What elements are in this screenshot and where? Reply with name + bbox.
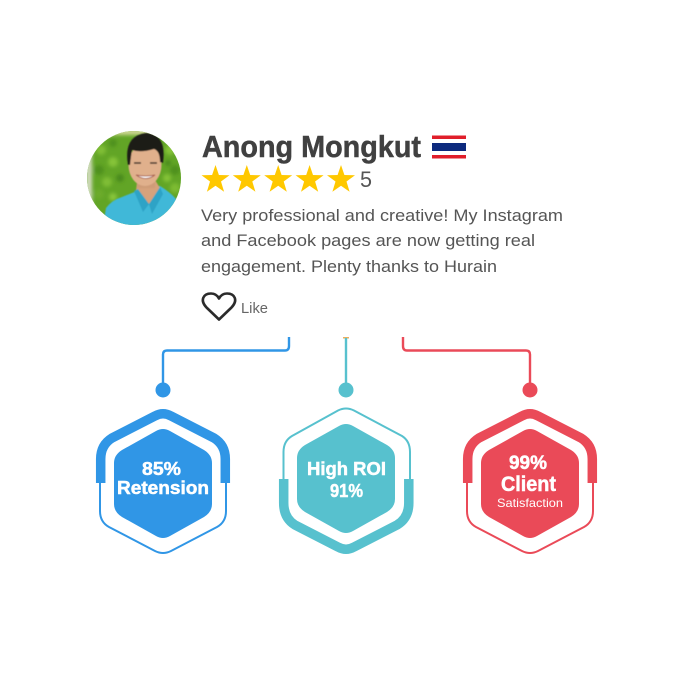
star rating	[202, 165, 355, 192]
rating number: 5	[360, 167, 372, 192]
badge: client satisfaction	[467, 414, 593, 553]
review text: engagement. Plenty thanks to Hurain	[201, 257, 497, 276]
face	[128, 144, 162, 186]
hair	[127, 133, 164, 165]
connector: blue	[156, 337, 289, 398]
badge text: 99%	[509, 453, 547, 474]
badge: retention	[100, 414, 226, 553]
review text	[201, 206, 563, 276]
review text: Very professional and creative! My Instagram	[201, 206, 563, 225]
avatar photo	[86, 129, 182, 226]
icon: heart	[203, 294, 235, 320]
review text: and Facebook pages are now getting real	[201, 231, 535, 250]
badge: high ROI	[284, 408, 410, 549]
badge text: Client	[501, 473, 556, 496]
icon: Thailand flag	[432, 135, 466, 159]
badge text: Retension	[117, 477, 209, 498]
badge text	[307, 458, 386, 501]
badge text: Satisfaction	[497, 496, 563, 510]
shirt	[103, 186, 182, 226]
panel: review card	[86, 129, 563, 320]
review infographic	[87, 131, 598, 554]
name: Anong Mongkut	[202, 129, 421, 164]
connector: red	[403, 337, 538, 398]
neck	[137, 176, 155, 188]
badge text: 85%	[142, 458, 181, 479]
like label: Like	[241, 301, 268, 317]
badge text: High ROI	[307, 458, 386, 479]
badge text	[497, 453, 563, 510]
connector: teal	[338, 337, 354, 398]
badge text: 91%	[330, 480, 363, 501]
badge text	[117, 458, 209, 498]
